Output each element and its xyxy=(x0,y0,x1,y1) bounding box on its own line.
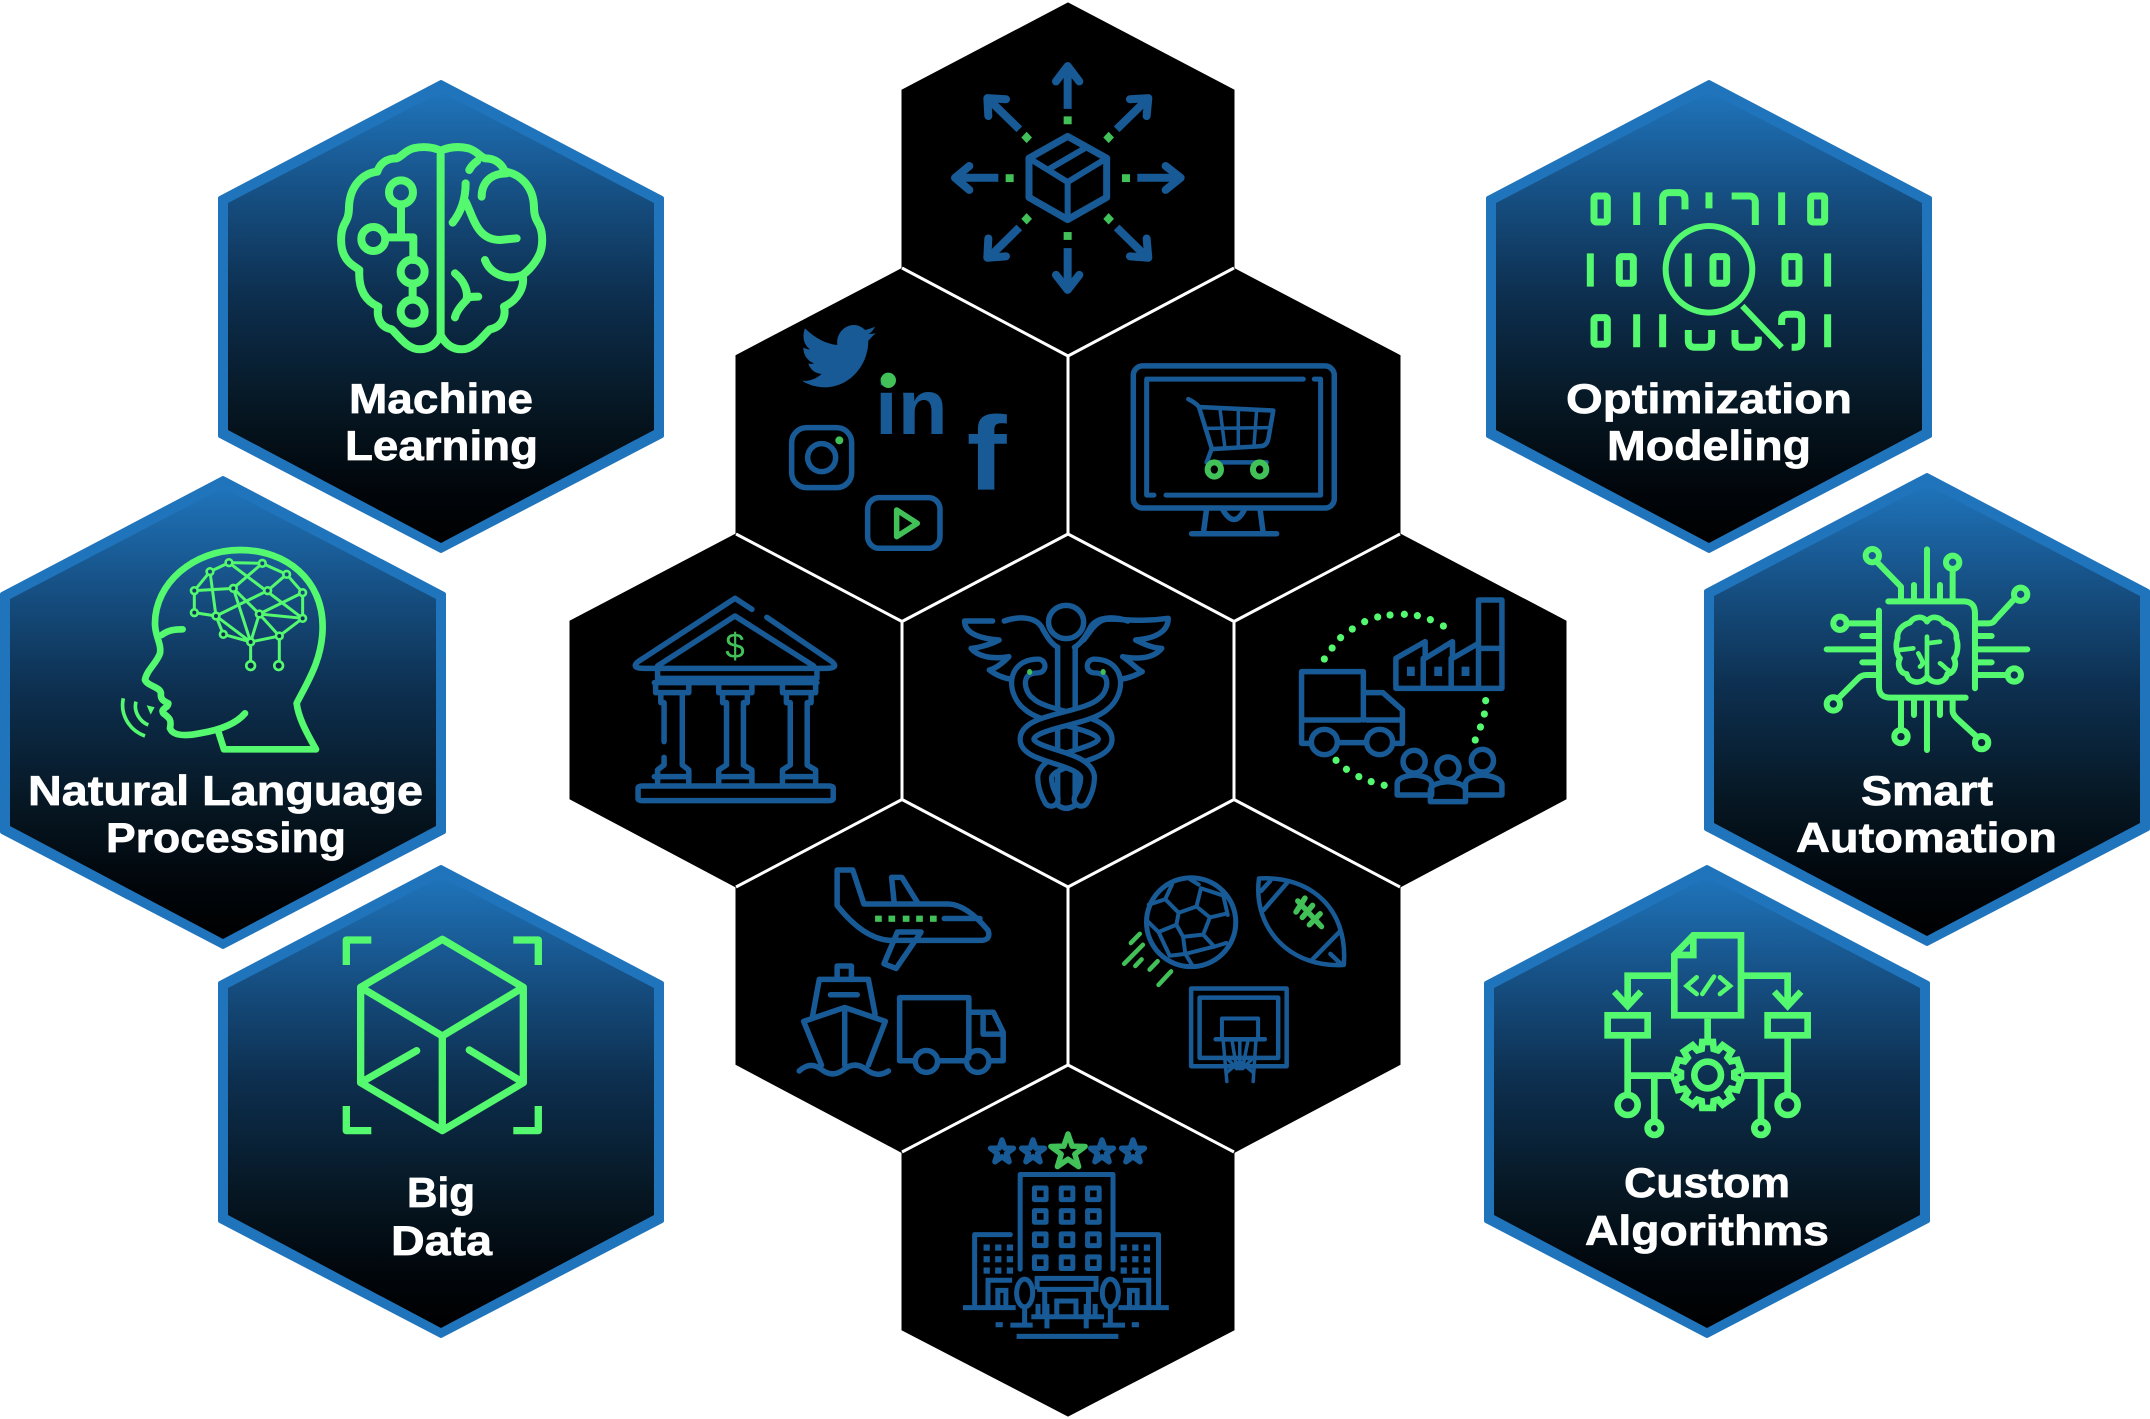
panel: Custom Algorithms xyxy=(1486,867,1928,1336)
icon: ship xyxy=(799,966,888,1074)
panel: center honeycomb xyxy=(570,3,1566,1416)
icon: binary data magnifier xyxy=(1590,192,1828,347)
label: Big Data: Data xyxy=(391,1217,493,1264)
icon: basketball hoop xyxy=(1191,989,1287,1082)
label: Custom Algorithms: Algorithms xyxy=(1585,1207,1829,1254)
label: Optimization Modeling: Modeling xyxy=(1607,422,1811,469)
icon: dollar sign: $ xyxy=(725,627,745,666)
icon: truck xyxy=(900,998,1003,1072)
icon: hotel xyxy=(963,1174,1169,1339)
icon: football xyxy=(1258,878,1344,965)
label: Natural Language Processing: Processing xyxy=(106,814,346,861)
icon: bank xyxy=(635,598,835,801)
icon: head with neural network xyxy=(123,550,323,749)
dotted circle xyxy=(1321,611,1489,789)
icon: plane ship truck xyxy=(799,870,1003,1074)
icon: supply chain xyxy=(1302,600,1502,802)
icon: facebook: f xyxy=(967,395,1008,512)
icon: package distribution xyxy=(955,66,1181,290)
icon: brain circuit xyxy=(341,147,542,349)
icon: instagram xyxy=(792,428,852,488)
icon: soccer ball xyxy=(1146,878,1236,967)
icon: cube with brackets xyxy=(346,939,538,1131)
label: Machine Learning: Machine xyxy=(349,375,533,422)
icon: plane xyxy=(837,870,989,968)
label: Custom Algorithms: Custom xyxy=(1624,1159,1790,1206)
icon: delivery truck xyxy=(1302,672,1402,755)
label: Big Data: Big xyxy=(407,1169,475,1216)
icon: social media logos xyxy=(792,325,1008,548)
label: Machine Learning: Learning xyxy=(345,422,538,469)
icon: youtube xyxy=(868,498,940,548)
icon: AI brain chip xyxy=(1827,549,2027,750)
panel: Big Data xyxy=(220,867,662,1336)
label: Natural Language Processing: Natural Language xyxy=(28,767,423,814)
icon: linkedin: in xyxy=(875,363,948,451)
icon: caduceus xyxy=(965,605,1168,808)
icon: people xyxy=(1397,749,1502,802)
panel: Optimization Modeling xyxy=(1488,82,1930,551)
icon: twitter bird xyxy=(802,325,876,387)
icon: shopping cart on monitor xyxy=(1133,366,1334,534)
speed lines xyxy=(1124,934,1171,985)
panel: Natural Language Processing xyxy=(2,478,444,947)
panel: Smart Automation xyxy=(1706,475,2148,944)
icon: code file, gear and flowchart xyxy=(1608,935,1808,1135)
label: Smart Automation: Smart xyxy=(1861,767,1993,814)
icon: hotel rating stars xyxy=(991,1134,1144,1167)
panel: Machine Learning xyxy=(220,82,662,551)
label: Smart Automation: Automation xyxy=(1796,814,2057,861)
label: Optimization Modeling: Optimization xyxy=(1566,375,1852,422)
icon: sports balls and hoop xyxy=(1124,878,1344,1082)
icon: factory xyxy=(1396,600,1502,688)
